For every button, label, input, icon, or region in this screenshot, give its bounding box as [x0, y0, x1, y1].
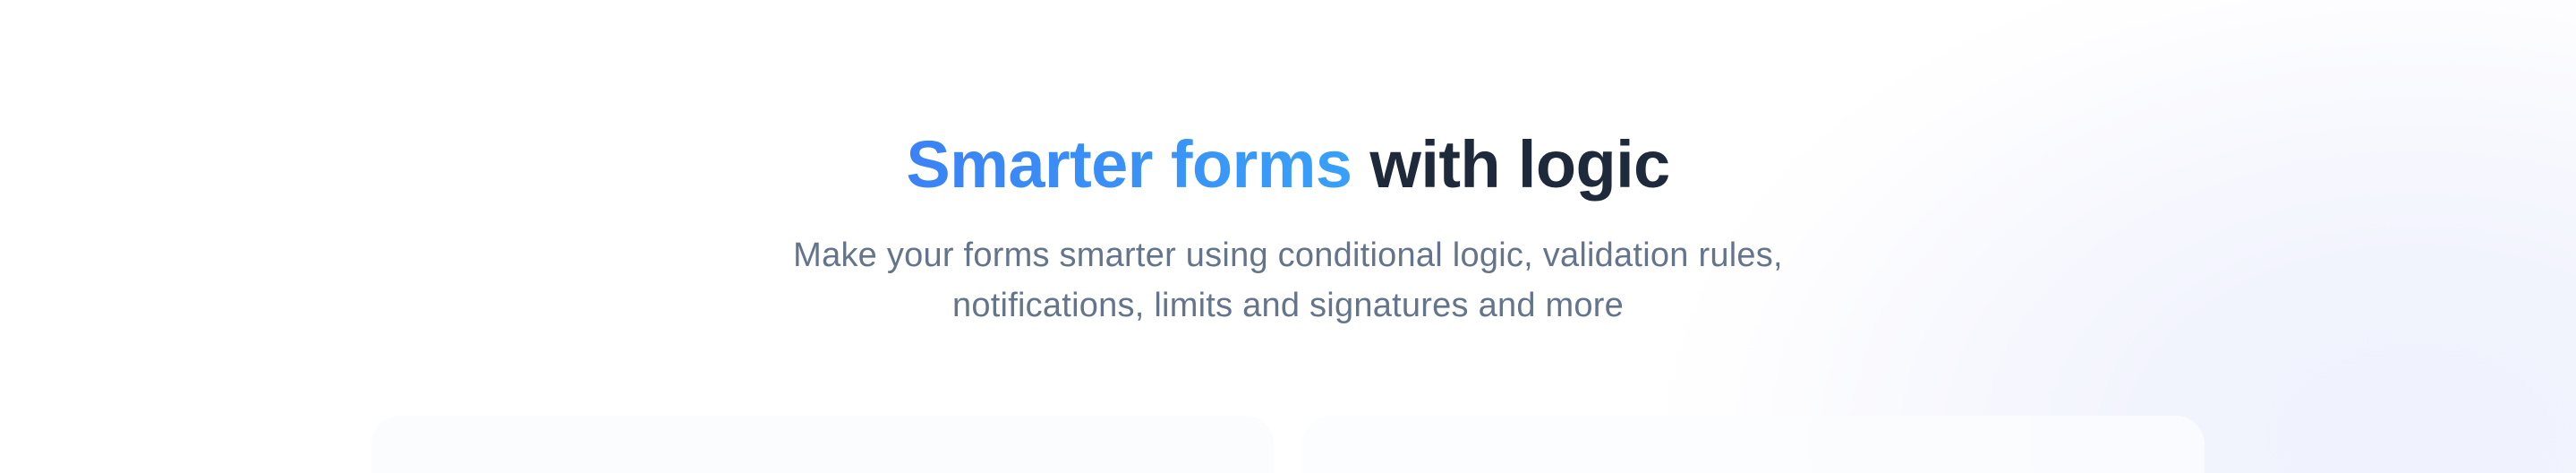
panel: right card [1302, 416, 2205, 473]
subtitle: Make your forms smarter using conditional logic, validation rules, [793, 236, 1783, 274]
panel: left card [371, 416, 1274, 473]
title: Smarter forms with logic [906, 127, 1670, 202]
subtitle: notifications, limits and signatures and more [952, 287, 1624, 324]
subtitle [793, 236, 1783, 324]
